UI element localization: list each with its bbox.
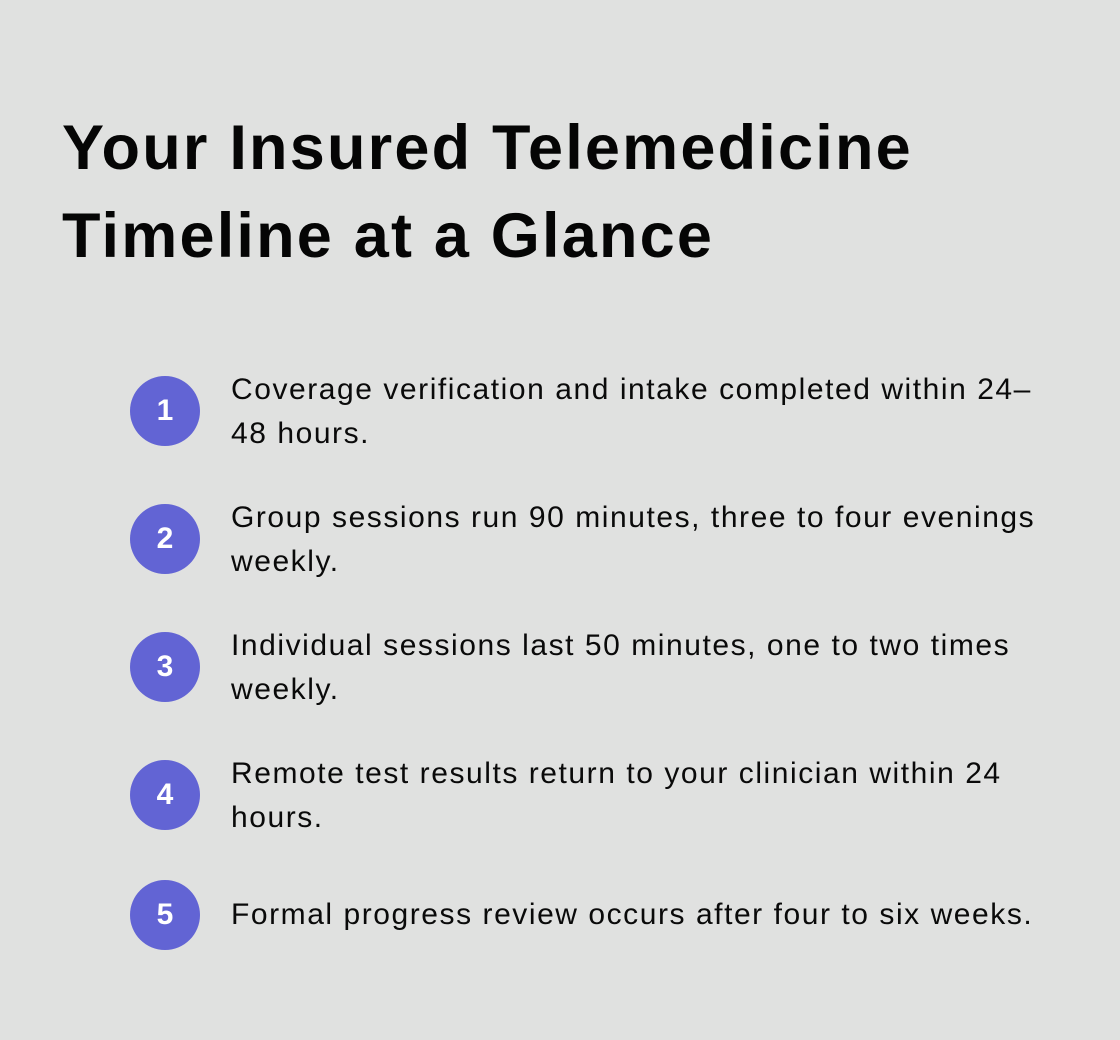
- text 5: Formal progress review occurs after four to six weeks.: [231, 898, 1033, 931]
- icon: number 2: 2: [157, 522, 173, 555]
- item 4: [130, 757, 1002, 834]
- text 1: 48 hours.: [231, 417, 370, 450]
- icon: number 3: 3: [157, 650, 173, 683]
- title: [62, 113, 913, 271]
- text 2: weekly.: [231, 545, 340, 578]
- text 4: Remote test results return to your clinician within 24: [231, 757, 1002, 790]
- text 3: weekly.: [231, 673, 340, 706]
- text 2: [231, 501, 1035, 578]
- text 3: Individual sessions last 50 minutes, one to two times: [231, 629, 1010, 662]
- text 1: [231, 373, 1032, 450]
- title: Timeline at a Glance: [62, 201, 714, 271]
- text 4: hours.: [231, 801, 324, 834]
- icon: number 4: [130, 760, 200, 830]
- item 5: [130, 880, 1033, 950]
- icon: number 2: [130, 504, 200, 574]
- item 3: [130, 629, 1010, 706]
- text 1: Coverage verification and intake completed within 24–: [231, 373, 1032, 406]
- icon: number 1: [130, 376, 200, 446]
- icon: number 3: [130, 632, 200, 702]
- text 3: [231, 629, 1010, 706]
- title: Your Insured Telemedicine: [62, 113, 913, 183]
- text 4: [231, 757, 1002, 834]
- item 2: [130, 501, 1035, 578]
- icon: number 1: 1: [157, 394, 173, 427]
- icon: number 4: 4: [157, 778, 173, 811]
- icon: number 5: 5: [157, 898, 173, 931]
- icon: number 5: [130, 880, 200, 950]
- item 1: [130, 373, 1032, 450]
- text 2: Group sessions run 90 minutes, three to four evenings: [231, 501, 1035, 534]
